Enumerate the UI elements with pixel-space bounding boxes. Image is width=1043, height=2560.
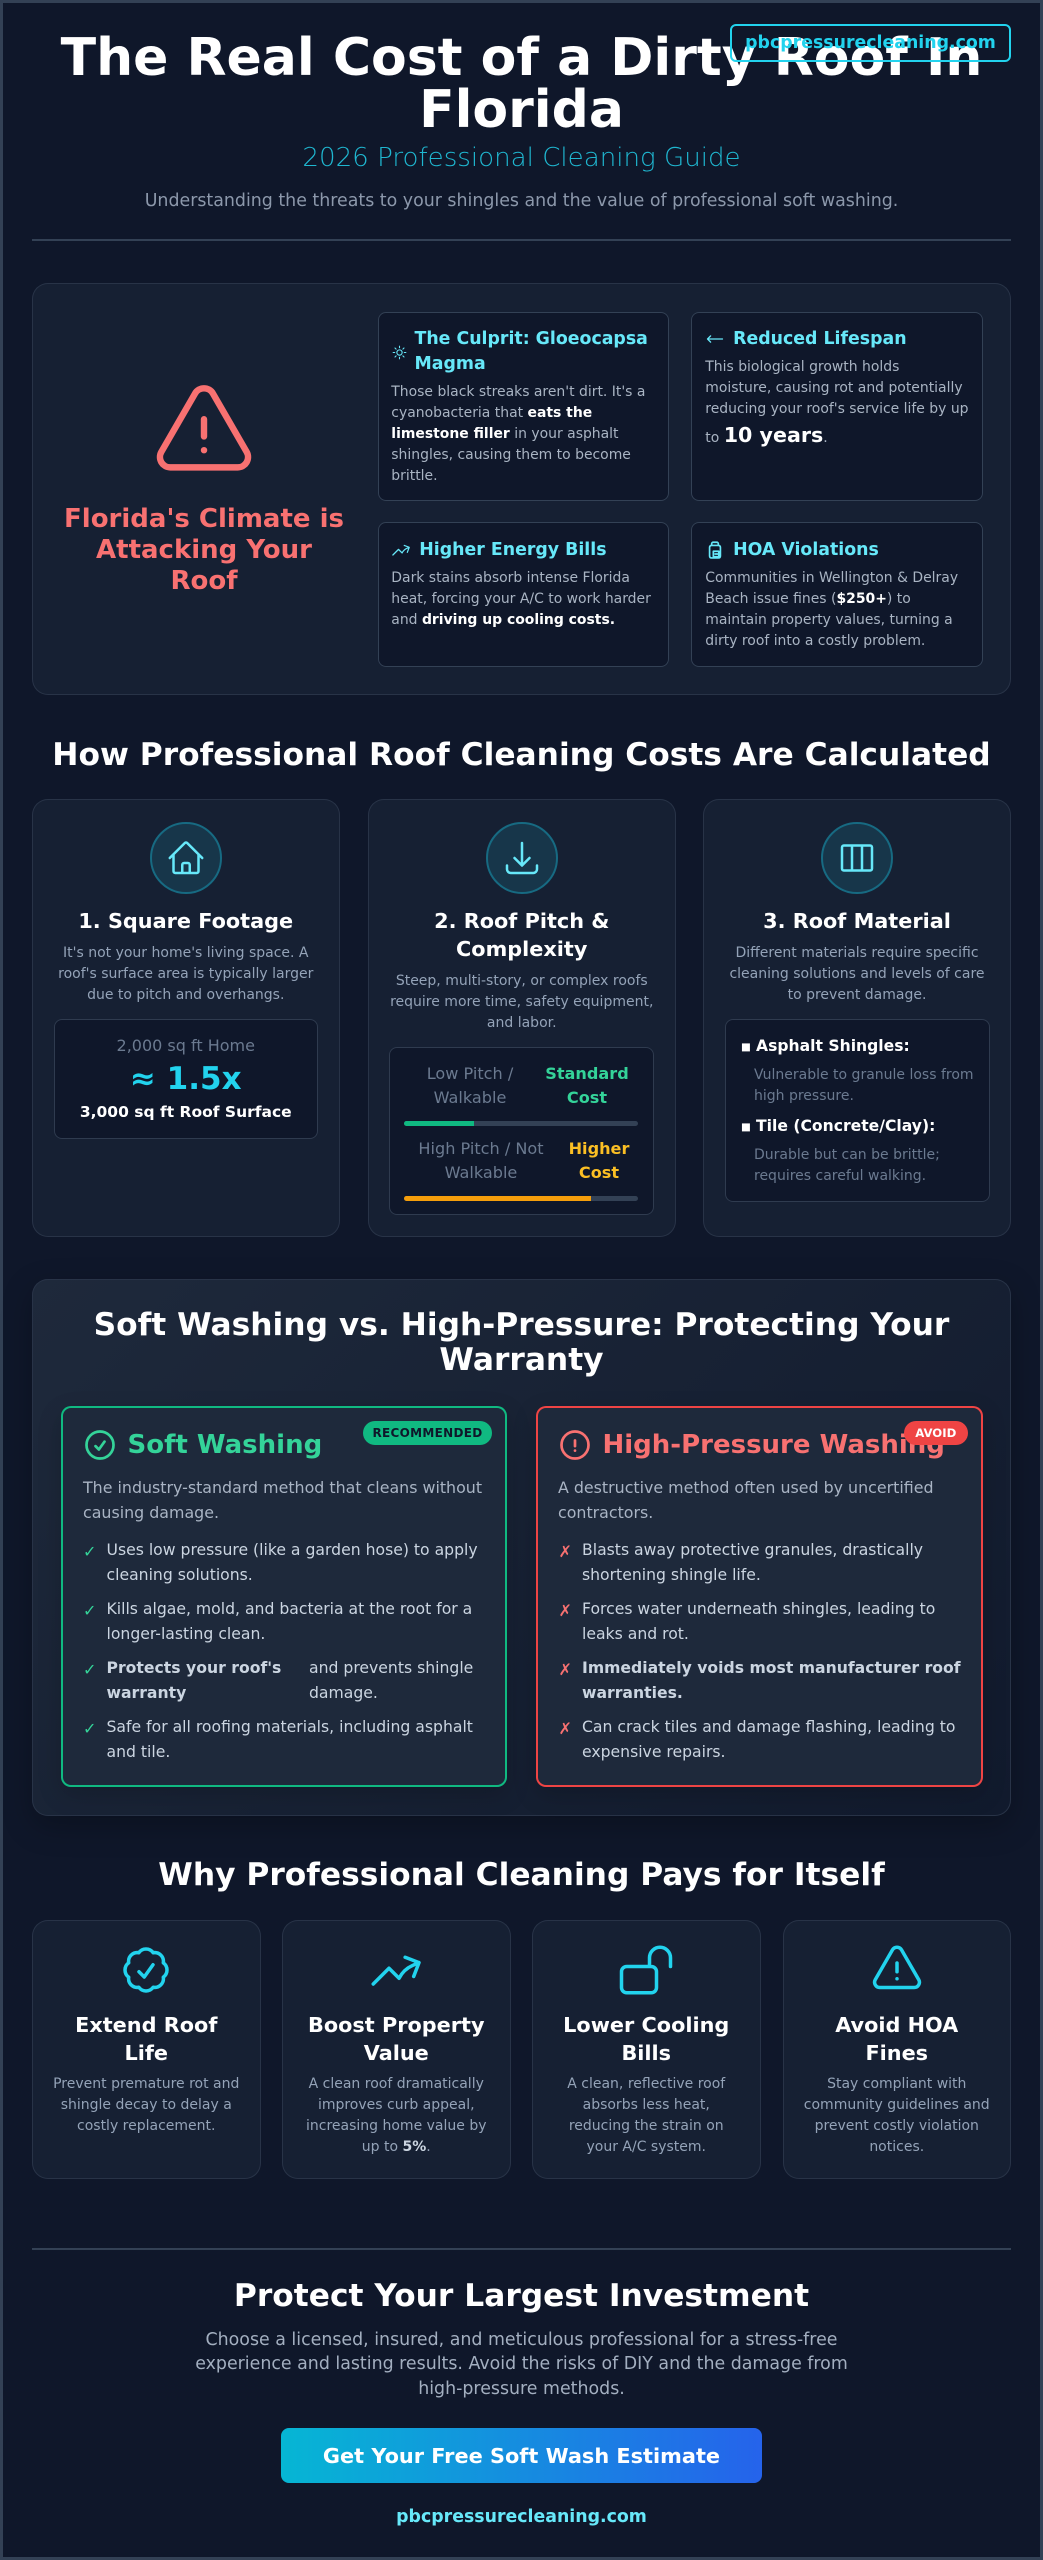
website chip bbox=[730, 24, 1011, 62]
icon: check circle bbox=[85, 1430, 115, 1460]
benefit 3 bbox=[83, 1658, 473, 1702]
risk 3: Immediately voids most manufacturer roof bbox=[582, 1658, 961, 1677]
avoid badge: AVOID bbox=[915, 1426, 956, 1440]
card description: to prevent damage. bbox=[788, 986, 926, 1002]
benefit 1: ✓ bbox=[83, 1542, 96, 1561]
asphalt heading: ■ bbox=[741, 1041, 751, 1053]
card description bbox=[58, 944, 314, 1002]
recommended badge bbox=[363, 1421, 492, 1445]
avoid badge bbox=[904, 1421, 968, 1445]
icon: check badge bbox=[123, 1947, 169, 1993]
CTA button: Get Your Free Soft Wash Estimate bbox=[323, 2444, 720, 2468]
icon: home bbox=[150, 822, 222, 894]
card: lower cooling bills bbox=[532, 1920, 760, 2179]
risk 1 bbox=[558, 1540, 923, 1584]
benefit text: your A/C system. bbox=[586, 2138, 706, 2154]
low pitch label bbox=[427, 1064, 514, 1107]
intro line: Understanding the threats to your shingles and the value of professional soft washing. bbox=[145, 190, 898, 210]
card description: and labor. bbox=[487, 1014, 557, 1030]
benefit title bbox=[282, 2012, 510, 2068]
HOA text: Beach issue fines ($250+) to bbox=[705, 590, 911, 606]
benefit title: Value bbox=[364, 2041, 429, 2065]
panel: Florida climate threats bbox=[32, 283, 1011, 695]
tile heading: ■ bbox=[741, 1121, 751, 1133]
benefit text: Stay compliant with bbox=[827, 2076, 966, 2092]
risk 3: ✗ bbox=[558, 1660, 572, 1679]
higher cost label bbox=[569, 1139, 630, 1182]
culprit heading: Magma bbox=[414, 354, 486, 374]
standard cost label bbox=[545, 1064, 629, 1107]
lifespan text: This biological growth holds bbox=[705, 359, 899, 375]
risk 1: shortening shingle life. bbox=[582, 1564, 761, 1584]
lifespan text: moisture, causing rot and potentially bbox=[705, 380, 963, 396]
energy text bbox=[391, 570, 651, 628]
title bbox=[60, 28, 982, 140]
benefit title bbox=[782, 2012, 1011, 2068]
comparison heading: Warranty bbox=[439, 1342, 604, 1378]
higher cost label: Cost bbox=[579, 1163, 619, 1182]
icon: download tray bbox=[486, 822, 558, 894]
benefit 2: ✓ bbox=[83, 1601, 96, 1620]
comparison heading: Soft Washing vs. High-Pressure: Protecting Your bbox=[94, 1306, 949, 1342]
recommended badge: RECOMMENDED bbox=[372, 1426, 482, 1440]
card: the culprit bbox=[378, 312, 669, 501]
lifespan heading: Reduced Lifespan bbox=[733, 329, 907, 349]
alert heading bbox=[64, 504, 344, 596]
website chip: pbcpressurecleaning.com bbox=[745, 33, 996, 53]
tile note bbox=[754, 1146, 940, 1184]
roof surface stat box bbox=[54, 1019, 318, 1139]
pitch cost box bbox=[389, 1047, 654, 1215]
benefit text: improves curb appeal, bbox=[318, 2096, 475, 2112]
subtitle: 2026 Professional Cleaning Guide bbox=[302, 143, 741, 173]
asphalt heading: Asphalt Shingles: bbox=[756, 1037, 910, 1055]
benefit title: Life bbox=[124, 2041, 168, 2065]
card title: Complexity bbox=[456, 937, 587, 961]
HOA text bbox=[705, 570, 958, 648]
card: avoid HOA fines bbox=[782, 1920, 1011, 2179]
card description: Steep, multi-story, or complex roofs bbox=[396, 972, 648, 988]
benefit 4 bbox=[83, 1717, 473, 1760]
icon: warning triangle bbox=[156, 385, 252, 471]
header divider bbox=[32, 239, 1011, 241]
benefit 3: damage. bbox=[309, 1682, 378, 1702]
benefit text: community guidelines and bbox=[804, 2096, 990, 2112]
energy text: and driving up cooling costs. bbox=[391, 612, 615, 628]
low pitch label: Low Pitch / bbox=[427, 1064, 513, 1083]
benefit text: increasing home value by bbox=[306, 2118, 486, 2134]
benefit text: absorbs less heat, bbox=[583, 2096, 710, 2112]
high-pressure description: A destructive method often used by uncertified bbox=[558, 1478, 934, 1497]
high-pressure description bbox=[558, 1478, 934, 1522]
lifespan text bbox=[705, 359, 969, 417]
card: reduced lifespan bbox=[691, 312, 983, 501]
footer divider bbox=[32, 2248, 1011, 2250]
panel: square footage bbox=[32, 799, 340, 1237]
benefit title: Lower Cooling bbox=[563, 2013, 729, 2037]
high pitch label: Walkable bbox=[445, 1163, 517, 1182]
icon: columns bbox=[821, 822, 893, 894]
culprit text: cyanobacteria that eats the bbox=[391, 404, 592, 420]
soft washing description: The industry-standard method that cleans without bbox=[83, 1478, 482, 1497]
HOA text: dirty roof into a costly problem. bbox=[705, 632, 925, 648]
comparison heading bbox=[94, 1306, 950, 1378]
benefit text: up to 5%. bbox=[362, 2138, 431, 2154]
card description: It's not your home's living space. A bbox=[63, 944, 308, 960]
card: extend roof life bbox=[32, 1920, 260, 2179]
risk 2 bbox=[558, 1599, 935, 1642]
high pitch bar bbox=[404, 1196, 638, 1201]
heading: cost calculation: How Professional Roof Cleaning Costs Are Calculated bbox=[52, 736, 991, 772]
benefit title: Avoid HOA bbox=[835, 2013, 958, 2037]
energy heading: Higher Energy Bills bbox=[419, 540, 607, 560]
card: soft washing bbox=[61, 1406, 507, 1787]
culprit text: limestone filler in your asphalt bbox=[391, 426, 619, 442]
tile heading: Tile (Concrete/Clay): bbox=[756, 1117, 935, 1135]
benefit 2: longer-lasting clean. bbox=[106, 1624, 265, 1642]
material list box bbox=[725, 1019, 990, 1202]
lifespan stat: to 10 years. bbox=[705, 423, 828, 447]
risk 4 bbox=[558, 1717, 955, 1760]
HOA text: Communities in Wellington & Delray bbox=[705, 570, 958, 586]
high-pressure title: High-Pressure Washing bbox=[602, 1430, 945, 1460]
tile note: Durable but can be brittle; bbox=[754, 1146, 940, 1162]
risk 1: ✗ bbox=[558, 1542, 572, 1561]
benefit text bbox=[32, 2074, 260, 2136]
risk 2: leaks and rot. bbox=[582, 1624, 689, 1642]
benefit 3: ✓ bbox=[83, 1660, 96, 1679]
risk 1: Blasts away protective granules, drastically bbox=[582, 1540, 923, 1559]
icon: sun bbox=[392, 346, 406, 360]
benefit 4: and tile. bbox=[106, 1742, 170, 1760]
panel: roof pitch bbox=[368, 799, 676, 1237]
benefit text: A clean roof dramatically bbox=[309, 2076, 484, 2092]
card description bbox=[390, 972, 653, 1030]
culprit text: shingles, causing them to become bbox=[391, 446, 631, 462]
benefit title bbox=[532, 2012, 760, 2068]
risk 2: Forces water underneath shingles, leading to bbox=[582, 1599, 935, 1618]
icon: warning triangle bbox=[869, 1942, 925, 1998]
risk 4: Can crack tiles and damage flashing, leading to bbox=[582, 1717, 955, 1736]
benefit 3: warranty bbox=[106, 1682, 186, 1702]
card description bbox=[729, 944, 985, 1002]
tile note: requires careful walking. bbox=[754, 1168, 926, 1184]
benefit title: Extend Roof bbox=[75, 2013, 217, 2037]
icon: exclamation circle bbox=[560, 1430, 590, 1460]
benefit title bbox=[32, 2012, 260, 2068]
culprit text: Those black streaks aren't dirt. It's a bbox=[391, 384, 645, 400]
benefit 3: Protects your roof's bbox=[106, 1658, 281, 1677]
soft washing description: causing damage. bbox=[83, 1502, 219, 1522]
culprit text: brittle. bbox=[391, 468, 438, 484]
benefit 2: Kills algae, mold, and bacteria at the root for a bbox=[106, 1599, 472, 1618]
footer call to action bbox=[0, 2248, 1043, 2538]
card title: 3. Roof Material bbox=[763, 909, 951, 933]
asphalt note bbox=[754, 1066, 974, 1104]
panel: roof material bbox=[703, 799, 1011, 1237]
asphalt note: Vulnerable to granule loss from bbox=[754, 1066, 974, 1082]
card description: Different materials require specific bbox=[735, 944, 979, 960]
benefit text: Prevent premature rot and bbox=[53, 2076, 239, 2092]
alert heading: Attacking Your bbox=[96, 535, 312, 565]
icon: arrow left bbox=[706, 335, 724, 343]
card description: cleaning solutions and levels of care bbox=[729, 966, 985, 982]
heading: benefits: Why Professional Cleaning Pays for Itself bbox=[158, 1856, 885, 1892]
title: The Real Cost of a Dirty Roof In bbox=[61, 28, 982, 88]
culprit heading bbox=[414, 329, 648, 374]
footer heading: Protect Your Largest Investment bbox=[234, 2278, 809, 2314]
icon: clipboard bbox=[708, 541, 722, 559]
card description: roof's surface area is typically larger bbox=[58, 966, 313, 982]
home size: 2,000 sq ft Home bbox=[117, 1036, 255, 1055]
benefit text: costly replacement. bbox=[77, 2118, 215, 2134]
footer paragraph: Choose a licensed, insured, and meticulous professional for a stress-free bbox=[206, 2330, 837, 2350]
benefit text: prevent costly violation bbox=[815, 2118, 979, 2134]
card: higher energy bills bbox=[378, 522, 669, 667]
footer website: pbcpressurecleaning.com bbox=[396, 2507, 647, 2527]
low pitch label: Walkable bbox=[434, 1088, 506, 1107]
asphalt note: high pressure. bbox=[754, 1088, 854, 1104]
culprit heading: The Culprit: Gloeocapsa bbox=[414, 329, 648, 349]
alert heading: Florida's Climate is bbox=[64, 504, 344, 534]
card: HOA violations bbox=[691, 522, 983, 667]
card title: 2. Roof Pitch & bbox=[434, 909, 609, 933]
panel: soft wash vs high pressure bbox=[32, 1279, 1011, 1816]
benefit 2 bbox=[83, 1599, 472, 1642]
HOA heading: HOA Violations bbox=[733, 540, 879, 560]
icon: open lock bbox=[618, 1942, 674, 1998]
benefit text: reducing the strain on bbox=[569, 2118, 724, 2134]
icon: trending up bbox=[392, 544, 410, 556]
high pitch label: High Pitch / Not bbox=[418, 1139, 544, 1158]
CTA button bbox=[281, 2428, 762, 2483]
card: high-pressure washing bbox=[536, 1406, 983, 1787]
benefit text bbox=[532, 2074, 760, 2158]
benefit 4: Safe for all roofing materials, including asphalt bbox=[106, 1717, 473, 1736]
card title bbox=[434, 909, 609, 961]
standard cost label: Cost bbox=[567, 1088, 607, 1107]
high-pressure description: contractors. bbox=[558, 1502, 653, 1522]
culprit text bbox=[391, 384, 645, 484]
benefit 1: cleaning solutions. bbox=[106, 1564, 253, 1584]
benefit text: notices. bbox=[869, 2138, 924, 2154]
title: Florida bbox=[419, 80, 624, 140]
risk 2: ✗ bbox=[558, 1601, 572, 1620]
card description: require more time, safety equipment, bbox=[390, 994, 653, 1010]
low pitch bar bbox=[404, 1121, 638, 1126]
roof surface: 3,000 sq ft Roof Surface bbox=[80, 1103, 292, 1121]
soft washing title: Soft Washing bbox=[128, 1430, 322, 1460]
energy text: heat, forcing your A/C to work harder bbox=[391, 590, 651, 606]
high pitch label bbox=[418, 1139, 544, 1182]
standard cost label: Standard bbox=[545, 1064, 629, 1083]
HOA text: maintain property values, turning a bbox=[705, 612, 953, 628]
card title: 1. Square Footage bbox=[78, 909, 293, 933]
card description: due to pitch and overhangs. bbox=[87, 986, 284, 1002]
risk 3 bbox=[558, 1658, 961, 1702]
benefit text bbox=[282, 2074, 510, 2158]
footer paragraph: high-pressure methods. bbox=[418, 2378, 625, 2398]
alert heading: Roof bbox=[170, 566, 238, 596]
energy text: Dark stains absorb intense Florida bbox=[391, 570, 630, 586]
footer paragraph bbox=[0, 2328, 1043, 2401]
benefit 4: ✓ bbox=[83, 1719, 96, 1738]
benefit 1 bbox=[83, 1540, 478, 1584]
lifespan text: reducing your roof's service life by up bbox=[705, 401, 969, 417]
header bbox=[32, 24, 1011, 241]
benefit text: A clean, reflective roof bbox=[567, 2076, 725, 2092]
benefit 3: and prevents shingle bbox=[309, 1658, 473, 1677]
risk 4: expensive repairs. bbox=[582, 1742, 726, 1760]
icon: trending up bbox=[368, 1942, 424, 1998]
benefit title: Bills bbox=[621, 2041, 671, 2065]
multiplier: ≈ 1.5x bbox=[130, 1061, 242, 1097]
benefit title: Boost Property bbox=[308, 2013, 485, 2037]
benefit text: shingle decay to delay a bbox=[61, 2096, 232, 2112]
soft washing description bbox=[82, 1478, 482, 1522]
footer paragraph: experience and lasting results. Avoid the risks of DIY and the damage from bbox=[195, 2354, 848, 2374]
risk 3: warranties. bbox=[582, 1682, 683, 1702]
benefit text bbox=[782, 2074, 1011, 2158]
benefit title: Fines bbox=[865, 2041, 928, 2065]
benefit 1: Uses low pressure (like a garden hose) to apply bbox=[106, 1540, 478, 1559]
higher cost label: Higher bbox=[569, 1139, 629, 1158]
card: boost property value bbox=[282, 1920, 510, 2179]
risk 4: ✗ bbox=[558, 1719, 572, 1738]
